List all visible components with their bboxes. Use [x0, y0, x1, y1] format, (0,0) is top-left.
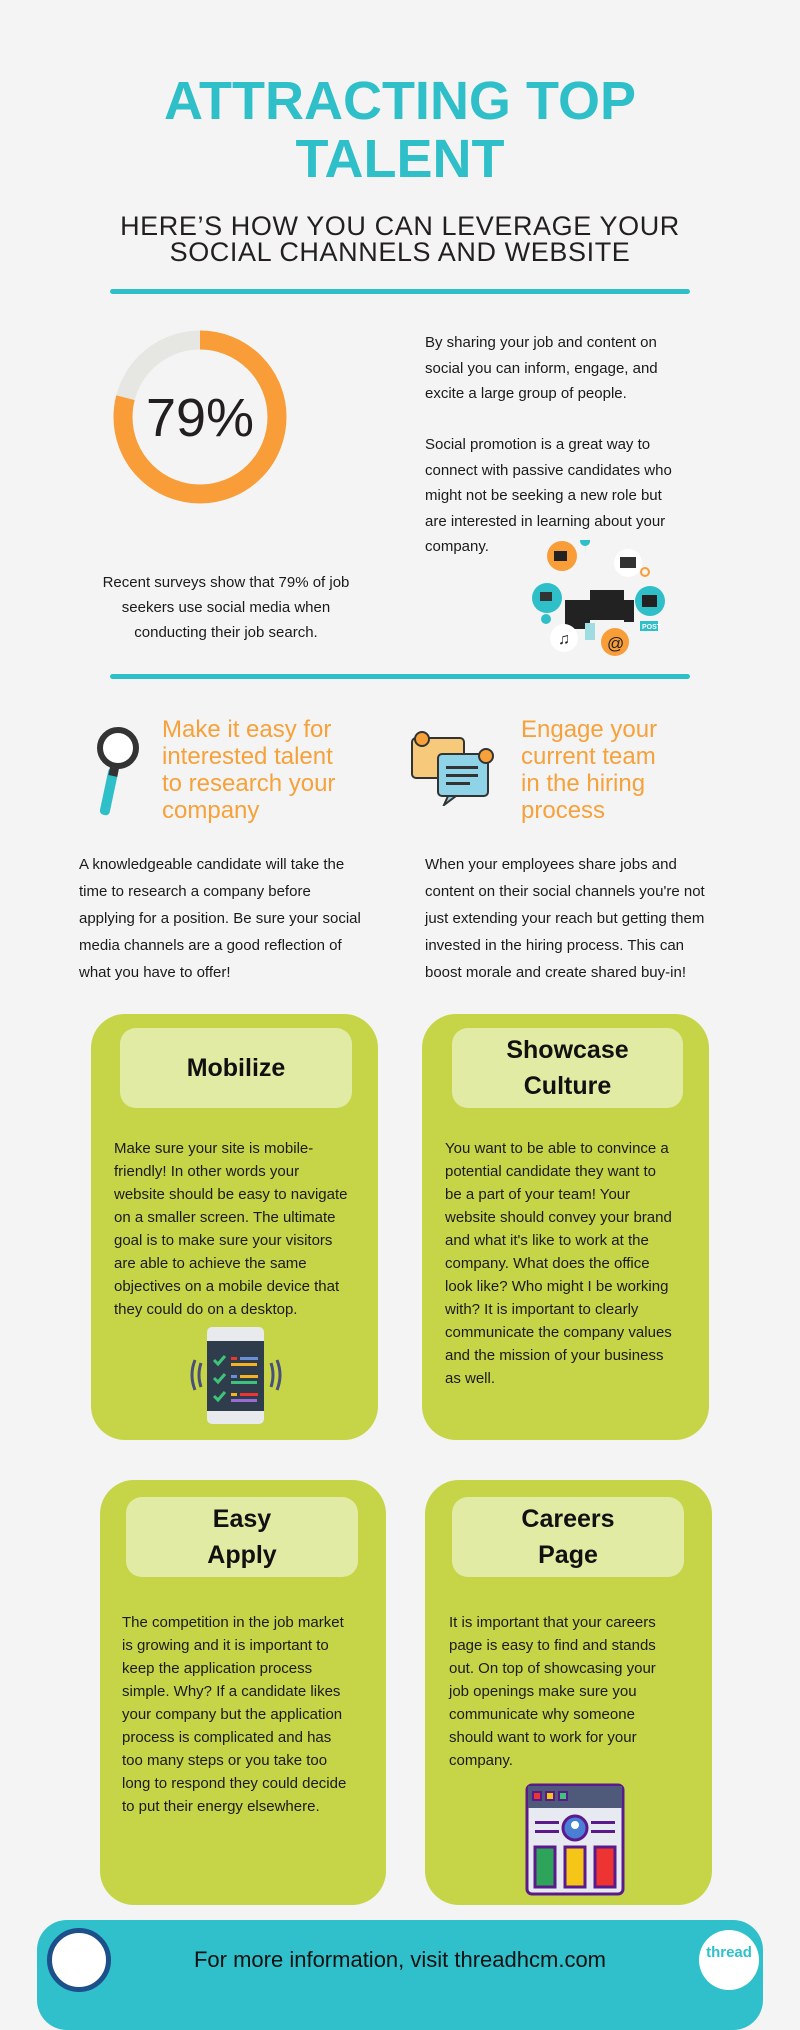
title: TALENT: [296, 129, 504, 189]
text: engage: boost morale and create shared buy-in!: [425, 964, 686, 981]
heading: easy apply: Easy: [213, 1505, 271, 1533]
text: mobilize: objectives on a mobile device that: [114, 1278, 339, 1295]
text: social sharing: By sharing your job and content on: [425, 334, 657, 351]
subtitle: HERE’S HOW YOU CAN LEVERAGE YOUR: [120, 211, 680, 241]
text: easy apply: keep the application process: [122, 1660, 312, 1677]
text: mobilize: friendly! In other words your: [114, 1163, 299, 1180]
caption: donut: Recent surveys show that 79% of job: [103, 574, 349, 591]
text: showcase: company. What does the office: [445, 1255, 650, 1272]
text: social sharing: excite a large group of people.: [425, 385, 627, 402]
text: easy apply: [122, 1614, 346, 1815]
text: engage: invested in the hiring process. This can: [425, 937, 684, 954]
heading: research: interested talent: [162, 743, 333, 770]
text: showcase: communicate the company values: [445, 1324, 672, 1341]
text: research: [79, 856, 361, 981]
heading: careers page: Careers: [521, 1505, 615, 1533]
heading: careers page: Page: [538, 1541, 598, 1569]
heading: research: to research your: [162, 770, 335, 797]
text: showcase: and what it's like to work at the: [445, 1232, 649, 1249]
text: careers: job openings make sure you: [449, 1683, 637, 1700]
text: social sharing: are interested in learning about your: [425, 512, 665, 530]
icon: phone: [190, 1327, 282, 1424]
subtitle: SOCIAL CHANNELS AND WEBSITE: [170, 237, 630, 267]
icon: chat bubbles: [411, 731, 494, 806]
text: easy apply: to put their energy elsewhere.: [122, 1798, 320, 1815]
caption: donut: [103, 574, 349, 641]
text: showcase: with? It is important to clearly: [445, 1301, 638, 1318]
text: easy apply: simple. Why? If a candidate likes: [122, 1683, 340, 1700]
icon: social media cluster: POST: [642, 624, 662, 631]
caption: donut: conducting their job search.: [134, 624, 318, 641]
text: showcase: look like? Who might I be working: [445, 1278, 668, 1295]
icon: social media cluster: @: [607, 634, 624, 653]
text: research: time to research a company before: [79, 883, 311, 900]
heading: mobilize: Mobilize: [187, 1054, 285, 1082]
heading: showcase culture: [452, 1028, 683, 1108]
heading: showcase culture: Showcase: [506, 1036, 629, 1064]
panel: showcase culture: [422, 1014, 709, 1440]
icon: social media cluster: [532, 540, 665, 656]
donut chart 79%: 79%: [146, 388, 254, 448]
text: careers: company.: [449, 1752, 513, 1769]
footer text: For more information, visit threadhcm.com: [194, 1947, 606, 1972]
text: showcase: You want to be able to convince a: [445, 1140, 669, 1157]
logo: thread: [699, 1930, 759, 1990]
heading: engage team: Engage your: [521, 716, 657, 743]
text: social sharing: [425, 334, 672, 555]
text: social sharing: company.: [425, 538, 489, 555]
logo: thread: thread: [706, 1944, 752, 1961]
footer: [37, 1920, 763, 2030]
text: showcase: website should convey your brand: [445, 1209, 672, 1226]
badge: best places to work: [47, 1928, 111, 1992]
text: showcase: and the mission of your business: [445, 1347, 663, 1364]
heading: showcase culture: Culture: [524, 1072, 611, 1100]
heading: engage team: process: [521, 797, 605, 824]
text: easy apply: your company but the application: [122, 1706, 342, 1723]
heading: easy apply: Apply: [207, 1541, 277, 1569]
heading: research: company: [162, 797, 259, 824]
text: research: media channels are a good reflection of: [79, 937, 342, 954]
text: easy apply: long to respond they could decide: [122, 1775, 346, 1792]
text: engage: [424, 856, 705, 981]
text: research: A knowledgeable candidate will take the: [79, 856, 344, 873]
heading: careers page: [452, 1497, 684, 1577]
icon: careers web page: [526, 1784, 624, 1896]
heading: engage team: current team: [521, 743, 656, 770]
text: mobilize: Make sure your site is mobile-: [114, 1140, 313, 1157]
text: easy apply: too many steps or you take too: [122, 1752, 327, 1769]
title: ATTRACTING TOP: [164, 71, 636, 131]
text: careers: should want to work for your: [449, 1729, 637, 1746]
text: easy apply: process is complicated and has: [122, 1729, 331, 1746]
text: social sharing: social you can inform, engage, and: [425, 360, 658, 376]
text: careers: communicate why someone: [449, 1706, 635, 1723]
text: careers: page is easy to find and stands: [449, 1637, 656, 1654]
heading: engage team: [521, 716, 657, 824]
icon: magnifier: [97, 727, 139, 816]
text: research: what you have to offer!: [79, 964, 230, 981]
text: mobilize: website should be easy to navigate: [114, 1186, 348, 1203]
panel: mobilize: [91, 1014, 378, 1440]
panel: easy apply: [100, 1480, 386, 1905]
text: mobilize: they could do on a desktop.: [114, 1301, 297, 1318]
donut chart 79%: [114, 330, 286, 504]
icon: social media cluster: ♫: [558, 631, 570, 648]
text: showcase: be a part of your team! Your: [445, 1186, 630, 1203]
text: showcase: potential candidate they want to: [445, 1163, 656, 1180]
text: showcase: as well.: [445, 1370, 495, 1387]
caption: donut: seekers use social media when: [122, 599, 330, 616]
text: careers: [448, 1614, 656, 1769]
text: engage: just extending your reach but getting them: [425, 910, 704, 927]
text: careers: It is important that your careers: [449, 1614, 656, 1631]
title: [164, 71, 636, 189]
subtitle: [120, 211, 680, 267]
text: mobilize: on a smaller screen. The ultimate: [114, 1209, 336, 1226]
text: careers: out. On top of showcasing your: [449, 1660, 656, 1677]
text: easy apply: The competition in the job market: [122, 1614, 344, 1631]
text: social sharing: might not be seeking a new role but: [425, 487, 662, 504]
text: social sharing: Social promotion is a great way to: [425, 436, 650, 453]
text: research: applying for a position. Be sure your social: [79, 910, 361, 927]
heading: research: Make it easy for: [162, 716, 331, 743]
heading: research: [162, 716, 335, 824]
text: mobilize: are able to achieve the same: [114, 1255, 307, 1272]
heading: easy apply: [126, 1497, 358, 1577]
text: social sharing: connect with passive candidates who: [425, 462, 672, 478]
text: mobilize: goal is to make sure your visitors: [114, 1232, 332, 1249]
heading: engage team: in the hiring: [521, 770, 645, 797]
panel: careers page: [425, 1480, 712, 1905]
text: easy apply: is growing and it is important to: [122, 1637, 329, 1654]
text: mobilize: [114, 1140, 348, 1318]
text: engage: content on their social channels you're not: [425, 883, 705, 900]
heading: mobilize: [120, 1028, 352, 1108]
text: engage: When your employees share jobs and: [425, 856, 677, 873]
text: showcase: [445, 1140, 672, 1387]
